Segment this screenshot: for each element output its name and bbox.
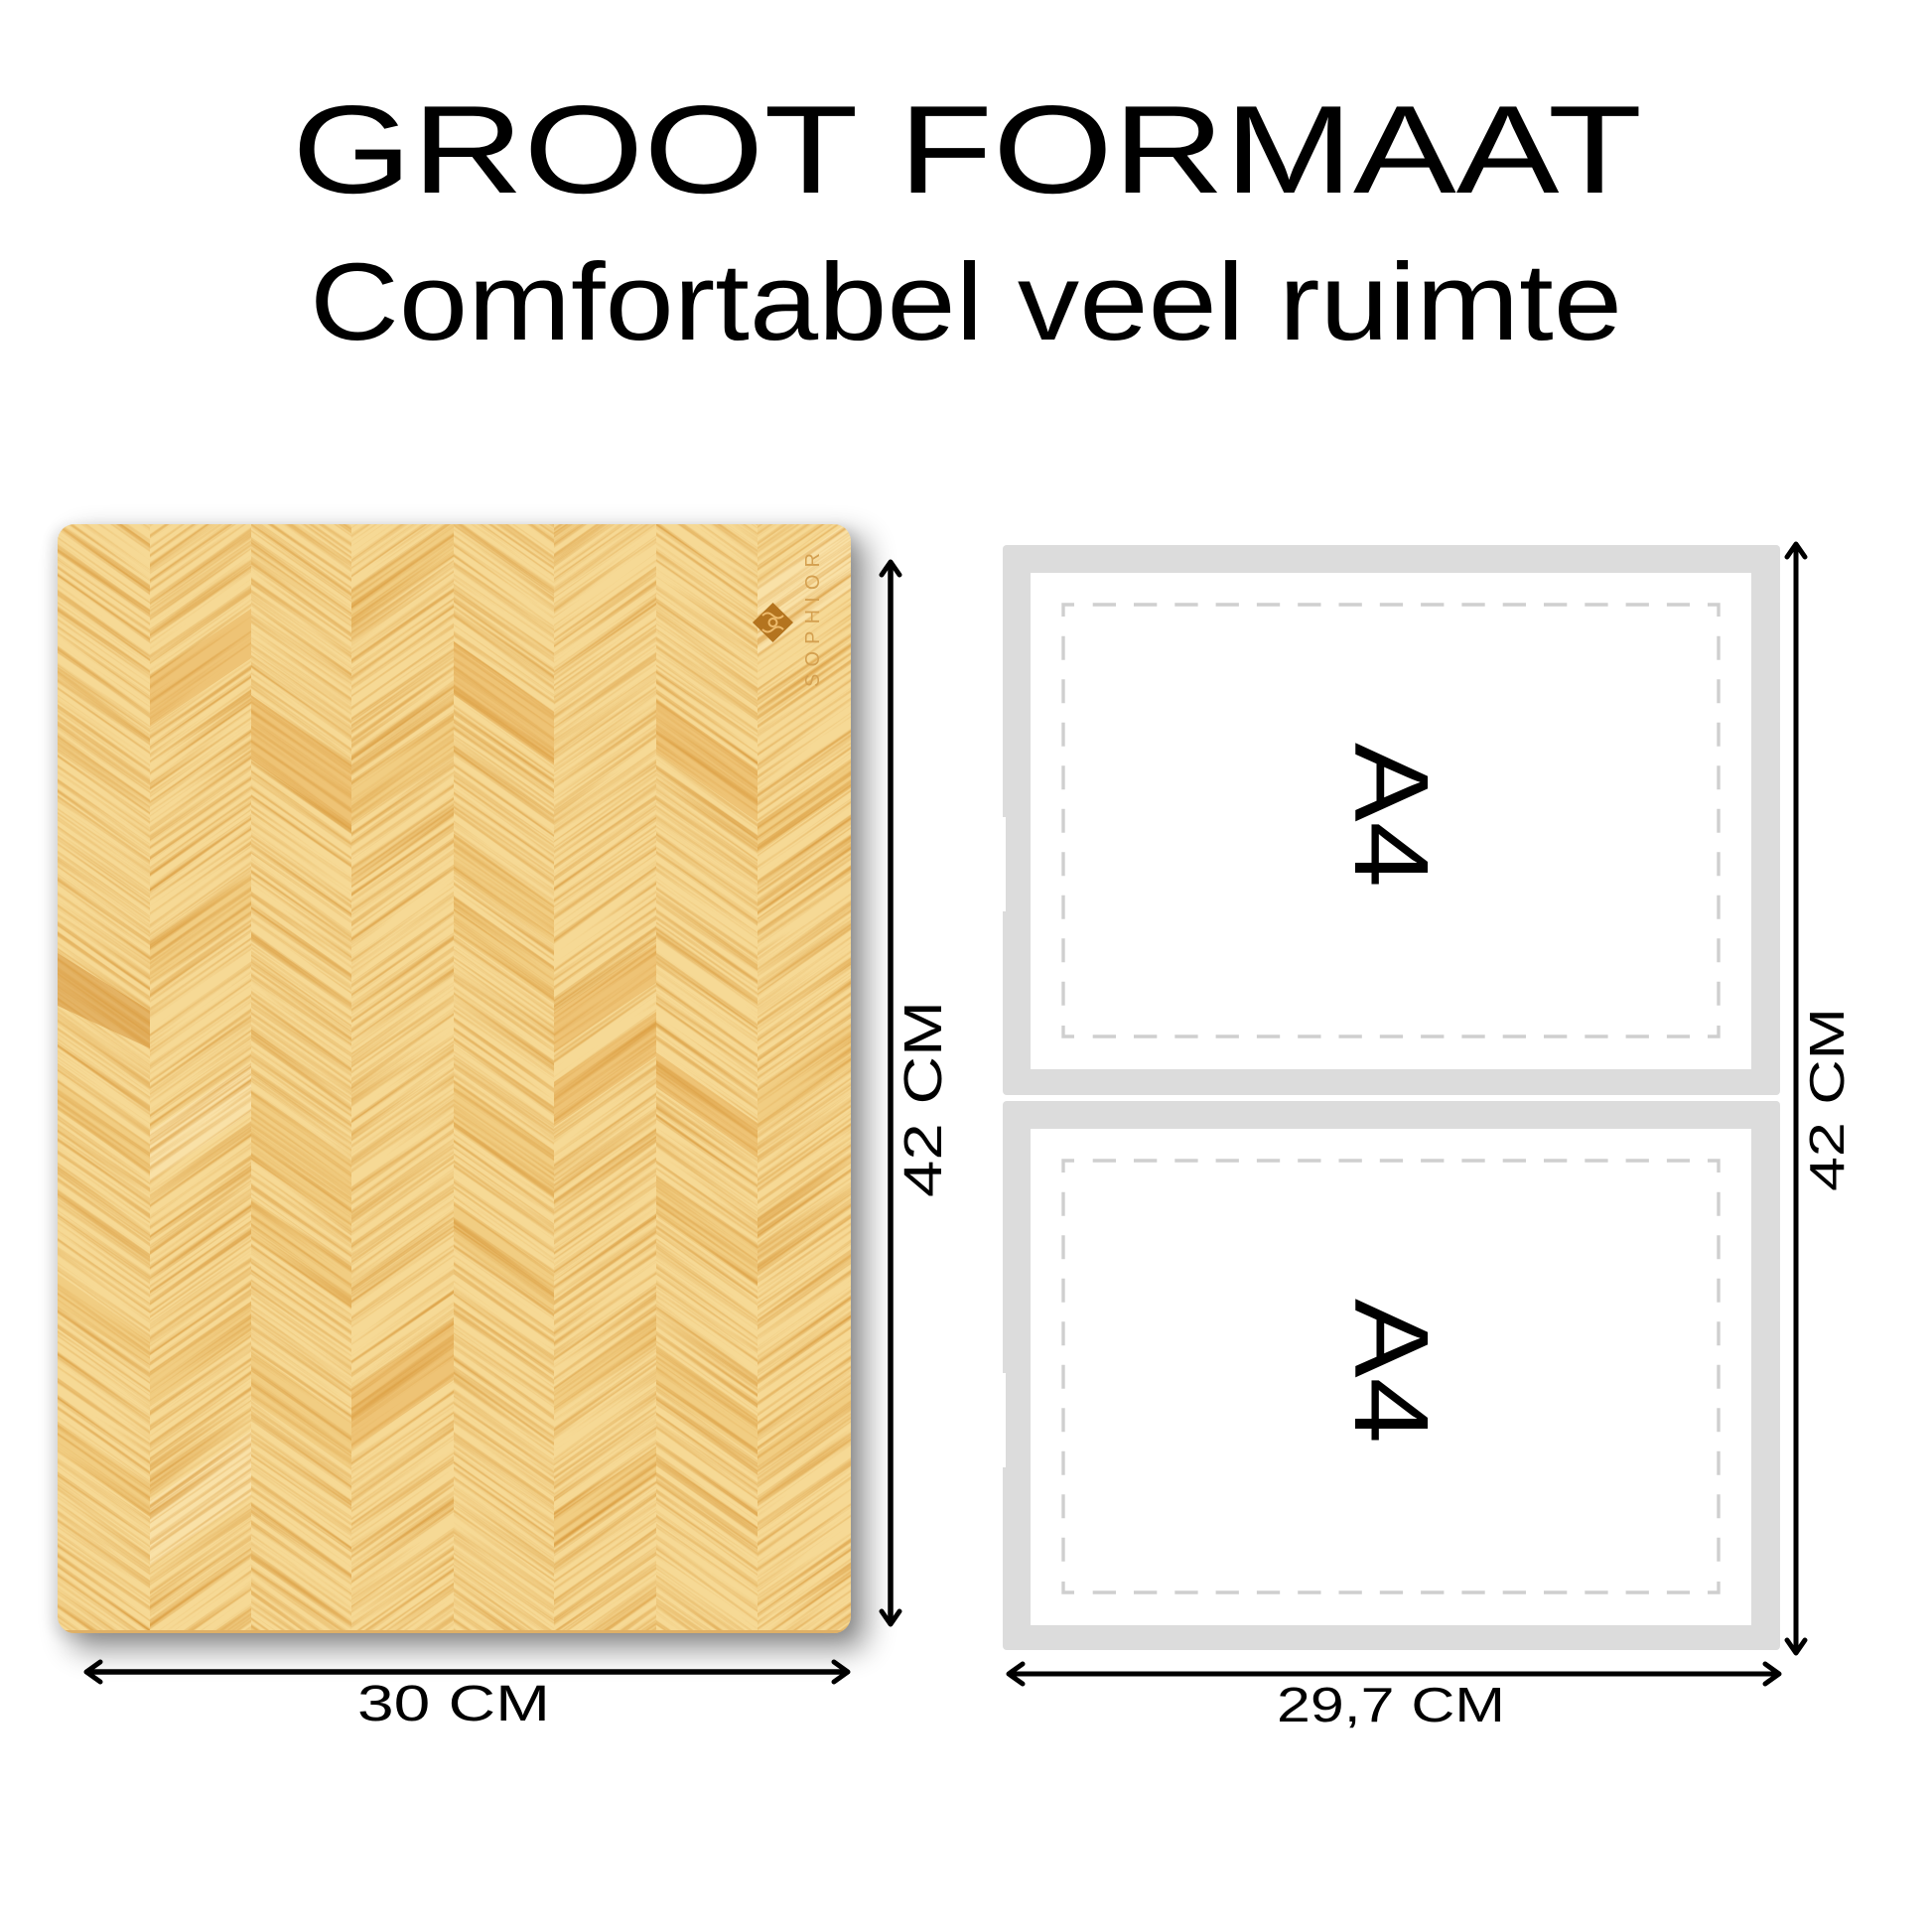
wood grain, ascending columns: [150, 524, 851, 1633]
panel: lower A4 sheet: [1003, 1101, 1780, 1650]
arrow: board width: [86, 1662, 848, 1682]
dashed cut line: [1063, 1161, 1719, 1592]
label: A4: A4: [1332, 1299, 1449, 1444]
arrow: A4 stack height: [1787, 544, 1805, 1653]
subtitle: Comfortabel veel ruimte: [310, 241, 1622, 363]
board lower edge: [58, 1630, 851, 1633]
label: board width 30 cm: 30 CM: [357, 1675, 550, 1731]
label: A4 stack height 42 cm: 42 CM: [1801, 1008, 1855, 1191]
arrow: A4 width: [1009, 1664, 1779, 1684]
board drop shadow: [52, 526, 867, 1650]
label: board height 42 cm: 42 CM: [894, 1001, 953, 1197]
label: A4 width 29,7 cm: 29,7 CM: [1277, 1679, 1505, 1732]
label: A4: A4: [1332, 743, 1449, 888]
dashed cut line: [1063, 605, 1719, 1036]
title: GROOT FORMAAT: [292, 79, 1642, 219]
chevron planks: tonal variation: [58, 520, 851, 1566]
logo: engraved diamond: [753, 603, 793, 642]
arrow: board height: [882, 562, 899, 1624]
panel: bamboo chopping board: [58, 520, 851, 1633]
wood grain, descending columns: [58, 524, 758, 1633]
panel: upper A4 sheet: [1003, 545, 1780, 1095]
infographic canvas: [47, 105, 1845, 1727]
logo wordmark: SOPHIOR: SOPHIOR: [802, 553, 824, 687]
